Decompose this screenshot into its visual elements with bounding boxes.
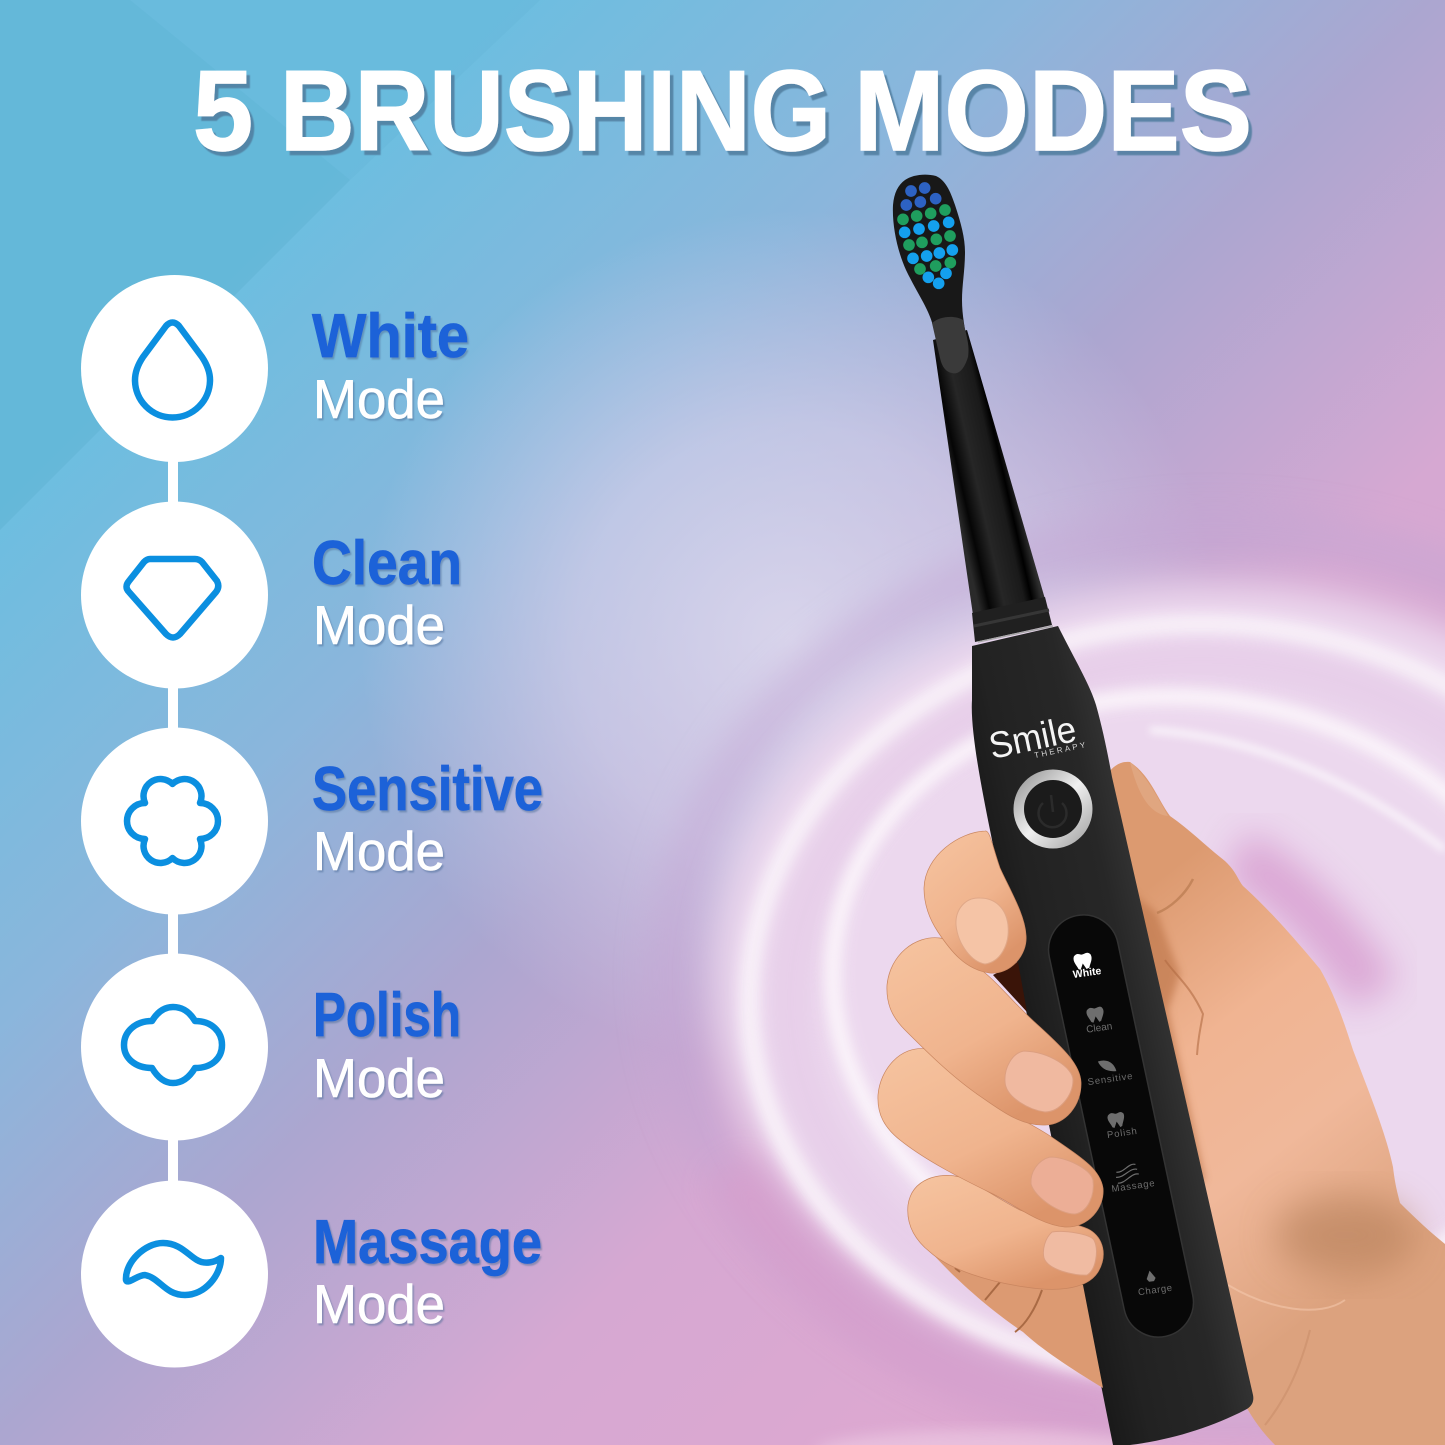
panel label: Polish: Polish (1106, 1126, 1138, 1141)
mode display panel (1042, 908, 1200, 1344)
finger: ring (878, 1049, 1103, 1227)
handle body (972, 626, 1253, 1445)
brand logo: Smile (985, 708, 1080, 767)
mode: Sensitive (81, 728, 543, 914)
finger: little (908, 1175, 1103, 1289)
title: BRUSHING (280, 48, 831, 175)
panel label: Sensitive (1085, 1057, 1134, 1088)
mode: White: Mode (313, 368, 445, 430)
icon: diamond (126, 559, 218, 638)
icon: wave (126, 1243, 221, 1295)
collar (972, 597, 1052, 642)
panel label: Massage: Massage (1111, 1178, 1156, 1195)
panel label: Clean (1083, 1005, 1113, 1036)
hand: palm and thumb behind the brush (1095, 762, 1445, 1445)
panel label: Charge: Charge (1137, 1283, 1173, 1298)
mode: Sensitive: Mode (313, 820, 445, 882)
icon: water drop (135, 322, 210, 417)
mode: Polish: Mode (313, 1047, 445, 1109)
hand: fingers in front of the brush (878, 831, 1103, 1388)
panel label: Charge (1135, 1268, 1173, 1298)
mode: Massage: Massage (313, 1208, 542, 1277)
mode: White: White (312, 302, 469, 371)
title: MODES (854, 48, 1252, 175)
panel label: Massage (1109, 1162, 1156, 1195)
mode: Sensitive: Sensitive (312, 755, 543, 824)
palm shadow next to brush (1130, 890, 1205, 1200)
panel label: Polish (1104, 1110, 1138, 1141)
mode: White (81, 275, 469, 462)
mode: Massage (81, 1180, 542, 1368)
mode: Clean (81, 502, 462, 688)
title: 5 (193, 48, 253, 175)
brush head (893, 175, 968, 368)
bristles (897, 182, 958, 289)
wrist shadow (1275, 1195, 1415, 1275)
lower palm under fingers (925, 1245, 1103, 1388)
thumb nail side (1130, 762, 1168, 816)
panel label: White (1070, 951, 1102, 981)
brush neck tongue (932, 317, 969, 373)
panel label: Sensitive: Sensitive (1087, 1071, 1134, 1088)
dark gap between fingers (993, 962, 1027, 1012)
brand logo: THERAPY (1033, 740, 1087, 760)
connector lines (168, 455, 178, 1188)
finger: index (924, 831, 1026, 973)
mode: Massage: Mode (313, 1273, 445, 1335)
mode: Polish: Polish (313, 981, 461, 1050)
power button (1014, 770, 1092, 848)
mode: Polish (81, 954, 461, 1140)
finger: middle (887, 938, 1081, 1125)
brush stem (933, 330, 1045, 615)
panel label: White: White (1072, 965, 1102, 981)
icon: cloud (124, 1007, 222, 1083)
toothbrush (893, 175, 1253, 1445)
mode: Clean: Clean (312, 529, 462, 598)
panel label: Clean: Clean (1086, 1021, 1113, 1036)
icon: flower (127, 779, 218, 863)
title (193, 48, 1252, 175)
mode: Clean: Mode (313, 594, 445, 656)
